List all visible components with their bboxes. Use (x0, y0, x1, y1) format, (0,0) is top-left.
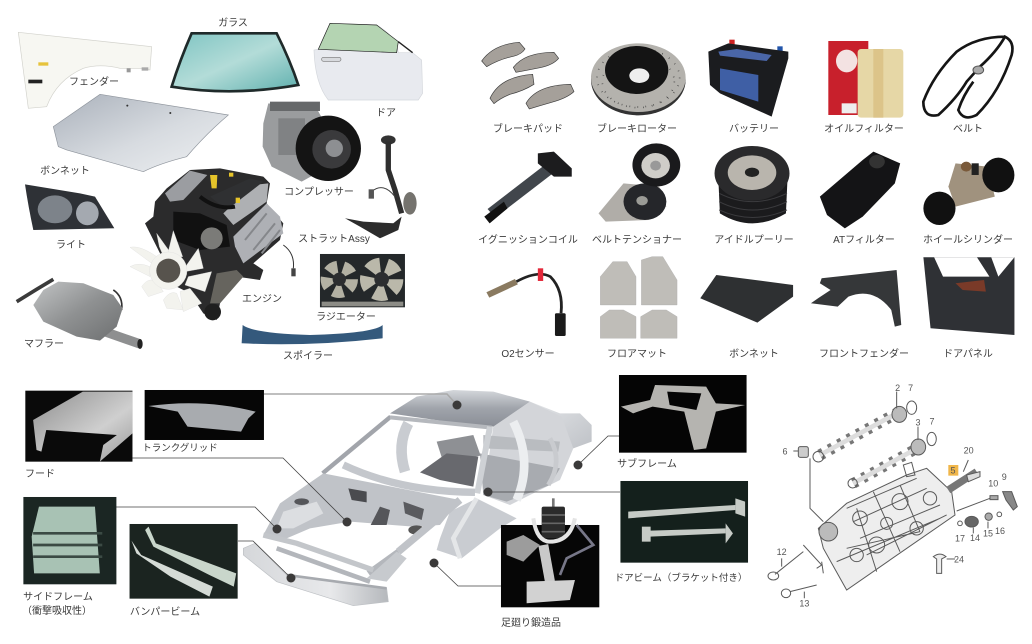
panel: replacement parts catalog grid (478, 37, 1014, 360)
photo: suspension forgings (501, 498, 599, 629)
part: ignition coil (478, 152, 578, 246)
part: battery (708, 40, 788, 135)
photo: hood: フード (25, 469, 55, 480)
part: strut assembly (298, 135, 417, 245)
photo: trunk grid: トランクグリッド (142, 442, 218, 454)
leader line: side frame (116, 507, 277, 529)
part numbers: 15 (983, 529, 993, 539)
part: engine (130, 168, 296, 320)
photo: bumper beam (130, 524, 238, 618)
part numbers: 7 (929, 416, 934, 426)
part: ignition coil: イグニッションコイル (478, 233, 578, 246)
camshafts (793, 392, 936, 522)
leader line: trunk grid (264, 394, 457, 405)
part numbers: 5 (950, 465, 955, 475)
part: headlight (25, 184, 114, 251)
leader line: door beam (488, 491, 620, 493)
part: headlight: ライト (56, 239, 86, 251)
photo: side frame: （衝撃吸収性） (22, 604, 92, 617)
diagram: exploded cylinder head parts (768, 383, 1017, 609)
part: windshield glass: ガラス (218, 17, 248, 29)
part: oil filter with box (824, 41, 904, 135)
part: floor mats: フロアマット (607, 349, 667, 360)
photo: side frame: サイドフレーム (23, 591, 93, 603)
part numbers: 2 (895, 383, 900, 393)
part: idler pulley (714, 146, 794, 246)
photo: suspension forgings: 足廻り鍛造品 (501, 616, 561, 629)
part numbers: 16 (995, 526, 1005, 536)
photo: door beam (615, 481, 748, 584)
part: muffler (17, 279, 143, 350)
part: black bonnet (700, 275, 793, 360)
marker dots (272, 400, 582, 582)
part: spoiler: スポイラー (283, 350, 333, 362)
part numbers: 17 (955, 534, 965, 544)
part: bonnet (40, 94, 228, 177)
part: fender: フェンダー (69, 75, 119, 88)
photo: trunk grid (142, 390, 264, 454)
part numbers: 20 (964, 446, 974, 456)
illustration: car body frame (243, 390, 592, 606)
part: idler pulley: アイドルプーリー (714, 234, 794, 246)
part: belt tensioner (592, 143, 682, 246)
part: muffler: マフラー (24, 338, 64, 350)
leader line: suspension forgings (434, 563, 503, 586)
part numbers: 12 (777, 547, 787, 557)
part: brake rotor: ブレーキローター (597, 122, 677, 135)
part: black bonnet: ボンネット (729, 348, 779, 360)
part: bonnet: ボンネット (40, 165, 90, 177)
part: O2 sensor: O2センサー (501, 348, 555, 360)
part: compressor: コンプレッサー (284, 186, 354, 198)
part: engine: エンジン (242, 294, 282, 305)
part: AT filter (820, 152, 900, 246)
part: door panel (923, 257, 1014, 360)
part: black front fender: フロントフェンダー (819, 347, 909, 360)
photo: sub frame (617, 375, 747, 470)
part numbers (777, 383, 1007, 609)
part numbers: 7 (908, 383, 913, 393)
part: black front fender (811, 270, 909, 360)
leader line: sub frame (578, 436, 619, 465)
photo: door beam: ドアビーム（ブラケット付き） (615, 572, 747, 584)
panel: body parts group (17, 17, 423, 362)
highlight: part 5 (948, 465, 958, 476)
panel: aluminum car body diagram (22, 375, 748, 629)
leader line: hood (132, 458, 347, 522)
part: belt: ベルト (953, 123, 983, 135)
part: brake pads: ブレーキパッド (493, 122, 563, 135)
photo: hood (25, 391, 132, 480)
part: battery: バッテリー (729, 123, 779, 135)
part numbers: 3 (915, 418, 920, 428)
part: radiator: ラジエーター (316, 311, 376, 323)
part: door: ドア (376, 108, 396, 119)
part numbers: 13 (799, 599, 809, 609)
part: strut assembly: ストラットAssy (298, 233, 370, 245)
valve train parts (768, 460, 1017, 598)
part: wheel cylinder (923, 158, 1014, 246)
part: windshield glass (172, 17, 298, 91)
part: oil filter with box: オイルフィルター (824, 123, 904, 135)
part: AT filter: ATフィルター (833, 234, 895, 246)
part: brake rotor (591, 43, 686, 135)
photo: side frame (22, 497, 116, 617)
part: belt (923, 37, 1012, 135)
part: spoiler (242, 325, 383, 362)
part: door panel: ドアパネル (943, 348, 993, 360)
photo: sub frame: サブフレーム (617, 457, 677, 470)
cylinder head (818, 462, 955, 590)
part numbers: 10 (988, 479, 998, 489)
part: belt tensioner: ベルトテンショナー (592, 234, 682, 246)
part: O2 sensor (488, 268, 566, 360)
part: brake pads (482, 42, 574, 135)
part: radiator (316, 254, 405, 323)
part numbers: 9 (1002, 472, 1007, 482)
part numbers: 14 (970, 533, 980, 543)
part: fender (18, 32, 152, 108)
part: compressor (263, 102, 361, 198)
part: floor mats (600, 257, 677, 360)
part: door (314, 23, 423, 119)
part numbers: 6 (782, 446, 787, 456)
part numbers: 24 (954, 555, 964, 565)
leader line: bumper beam (238, 541, 291, 578)
photo: bumper beam: バンパービーム (130, 606, 200, 618)
part: wheel cylinder: ホイールシリンダー (923, 233, 1013, 246)
